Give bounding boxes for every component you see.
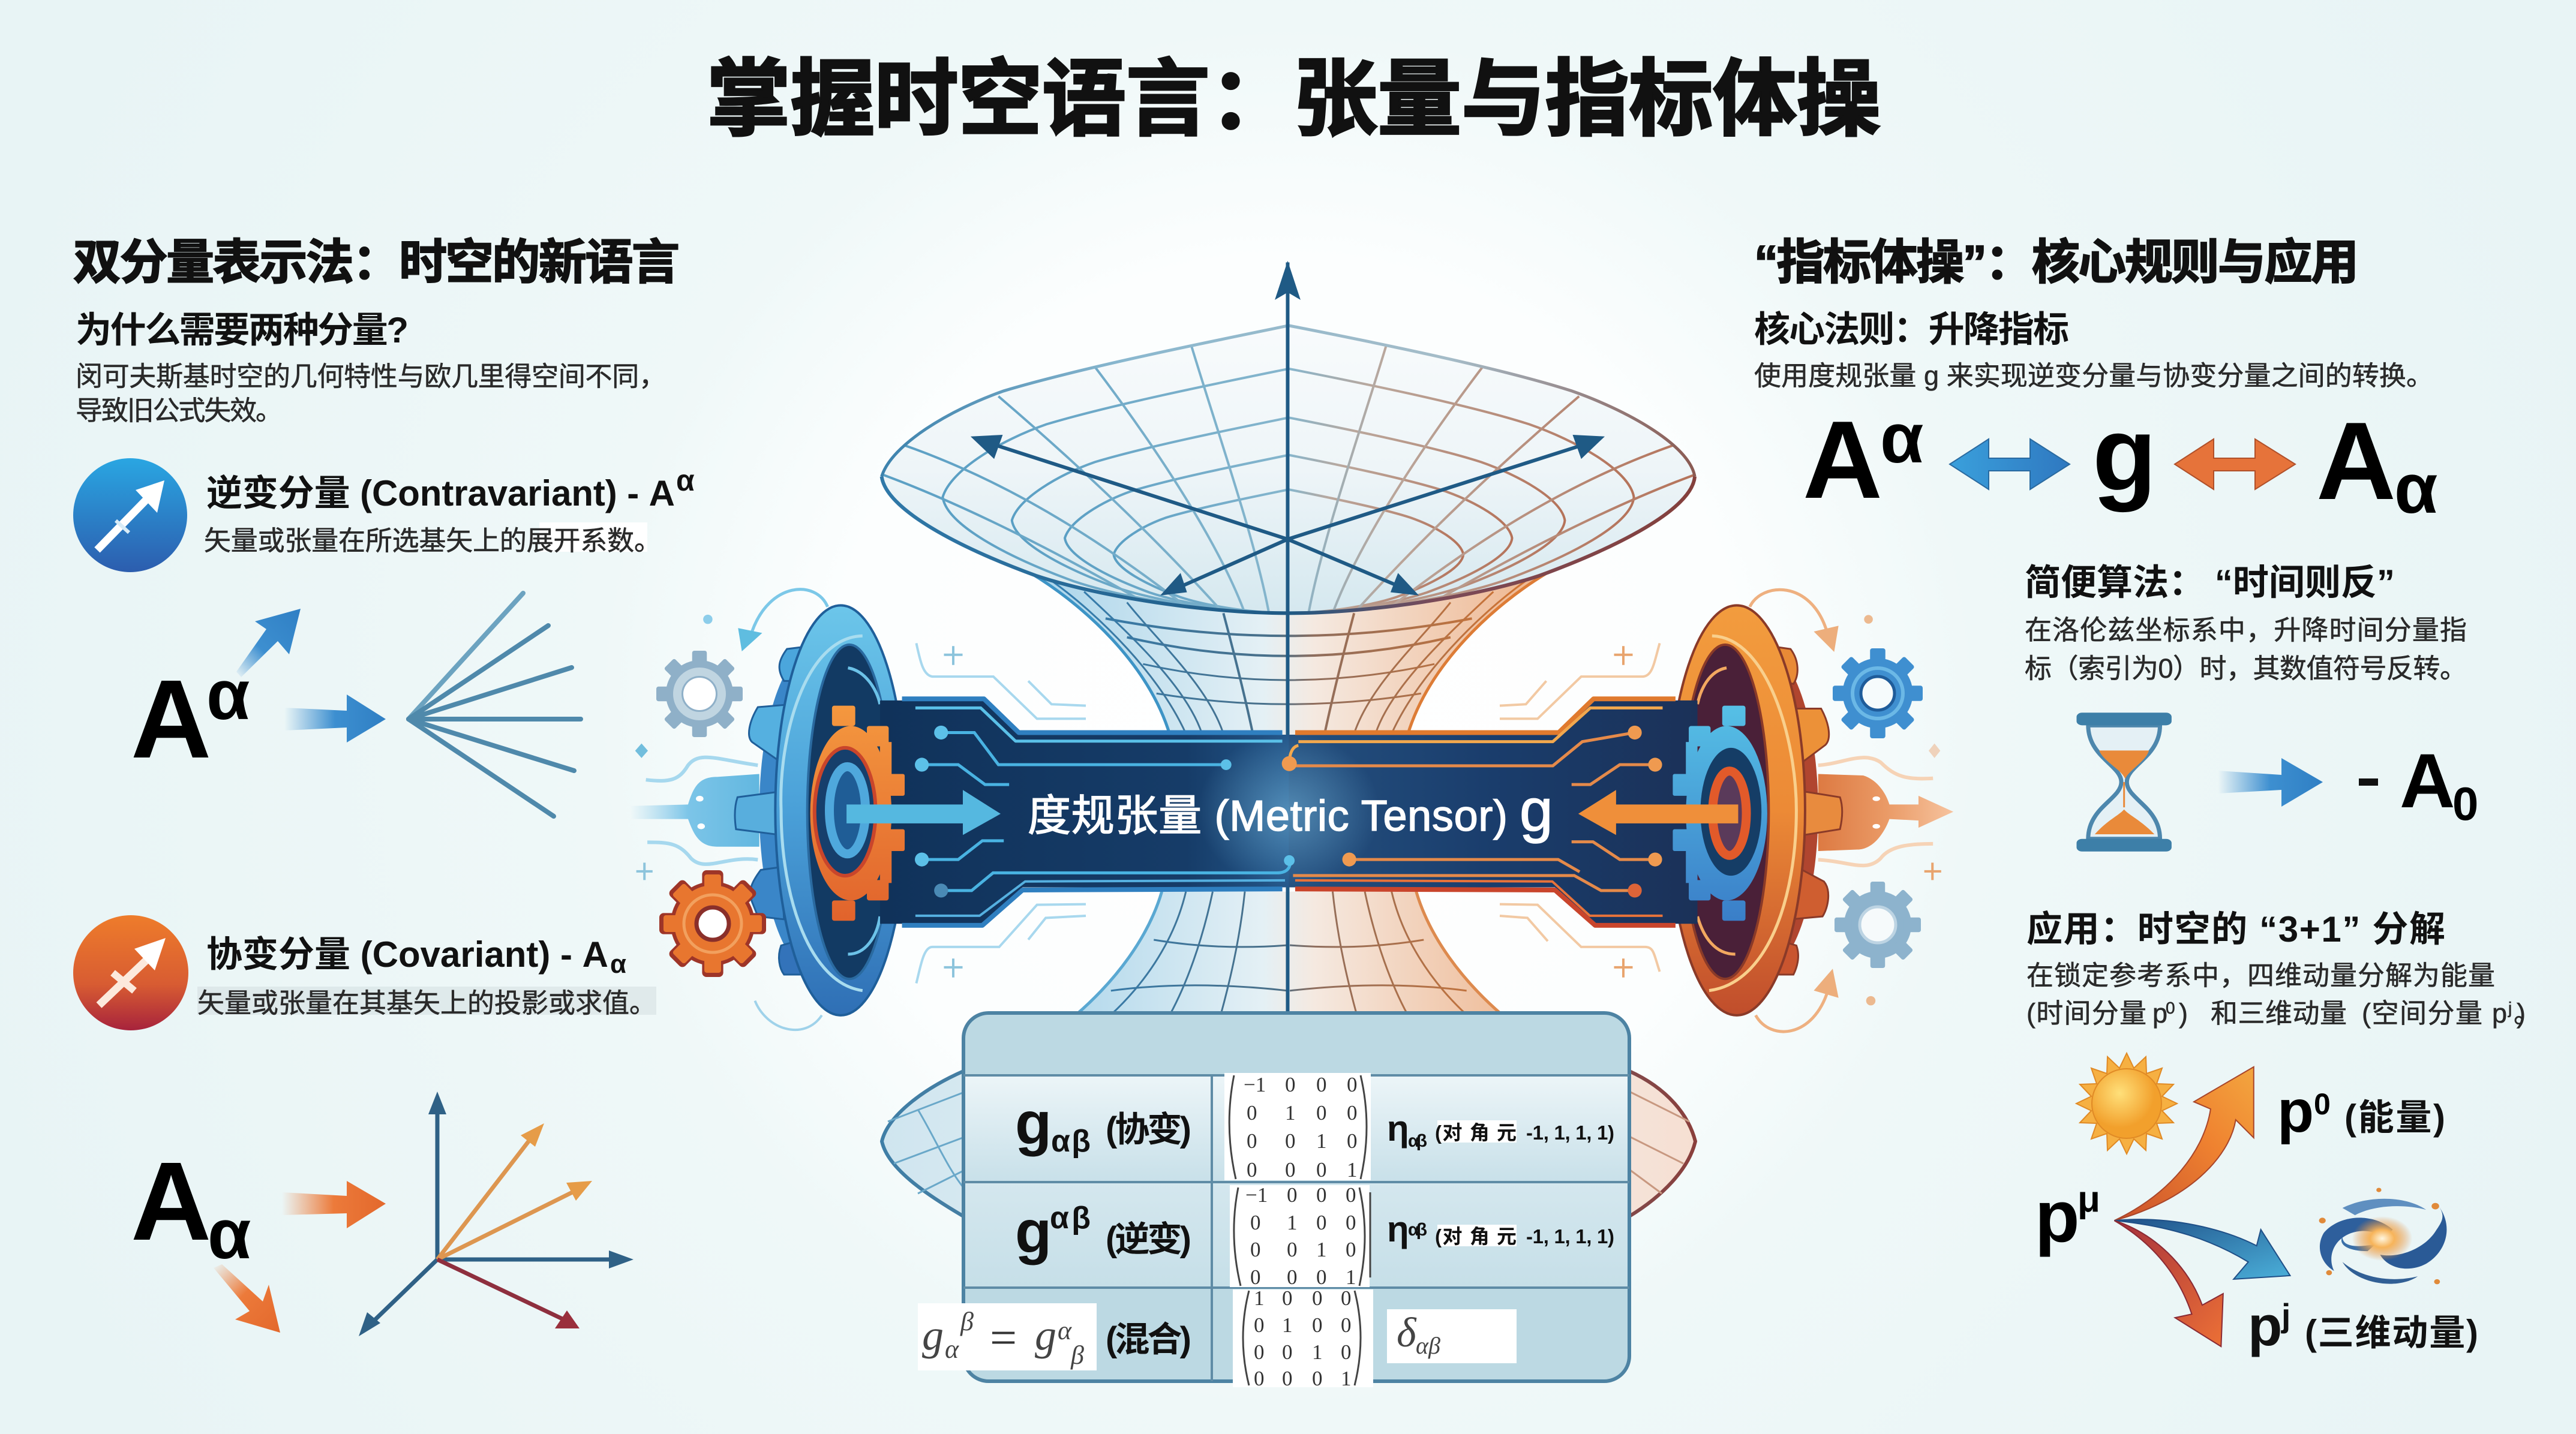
arrow: orange right <box>282 1181 386 1228</box>
row: mixed metric: δ <box>1397 1310 1417 1356</box>
label: metric tensor: g <box>1520 777 1553 844</box>
row: contravariant metric: 0 <box>1250 1211 1261 1234</box>
row: covariant metric: 0 <box>1247 1129 1257 1153</box>
row: contravariant metric: g <box>1015 1198 1052 1265</box>
icon: covariant badge <box>73 915 188 1030</box>
orange inner gear <box>810 706 905 921</box>
heading: dual-component notation: 双分量表示法：时空的新语言 <box>73 236 680 289</box>
small gear: orange lower left <box>661 872 764 975</box>
arrow: spatial blue <box>2114 1219 2290 1279</box>
row: covariant metric: 0 <box>1247 1158 1257 1182</box>
row: mixed metric: = <box>990 1312 1017 1364</box>
panel: index gymnastics <box>1754 236 2541 1357</box>
row: contravariant metric: 0 <box>1346 1183 1356 1207</box>
row: covariant metric: 0 <box>1247 1101 1257 1125</box>
text block: why two components <box>76 361 666 426</box>
row: contravariant metric: 1 <box>1346 1265 1356 1289</box>
row: contravariant metric: 0 <box>1287 1238 1297 1261</box>
panel: dual-component notation <box>73 236 695 1336</box>
icon: hourglass <box>2076 713 2172 852</box>
row: mixed metric: (混合) <box>1106 1320 1191 1359</box>
row: mixed metric: 0 <box>1282 1340 1292 1364</box>
row: mixed metric: α <box>1058 1316 1072 1345</box>
row: covariant metric: 1 <box>1347 1158 1357 1182</box>
row: contravariant metric: η <box>1387 1209 1409 1249</box>
left gear ring: back <box>735 605 906 1015</box>
row: contravariant metric: 0 <box>1316 1183 1327 1207</box>
formula: A lower alpha: α <box>208 1195 251 1274</box>
arrow: spatial red <box>2114 1220 2223 1346</box>
arrow: blue right <box>284 695 386 742</box>
text block: 3+1 decomposition <box>2026 960 2541 1029</box>
left gear ring: front <box>810 706 905 921</box>
row: mixed metric: 0 <box>1312 1313 1322 1337</box>
row: mixed metric: 0 <box>1341 1340 1351 1364</box>
row: covariant metric: −1 <box>1244 1073 1266 1096</box>
arrow: blue up right <box>236 609 301 677</box>
row: covariant metric: 1 <box>1316 1129 1327 1153</box>
text block: 3+1 decomposition: 0 <box>2166 999 2175 1017</box>
row: covariant metric: 0 <box>1316 1158 1327 1182</box>
row: mixed metric: 0 <box>1282 1286 1292 1310</box>
icon: sun <box>2076 1053 2177 1154</box>
icon: galaxy <box>2319 1188 2446 1284</box>
label: p zero energy: (能量) <box>2344 1098 2445 1138</box>
left arrow <box>846 790 1001 835</box>
row: covariant metric: η <box>1387 1108 1409 1149</box>
row: contravariant metric: (逆变) <box>1106 1220 1191 1259</box>
heading: covariant component: α <box>610 949 626 979</box>
text block: 3+1 decomposition: (空间分量 <box>2362 998 2482 1029</box>
row: mixed metric: 0 <box>1254 1367 1265 1390</box>
text block: why two components: 闵可夫斯基时空的几何特性与欧几里得空间不同， <box>76 361 666 392</box>
label: p j three-momentum <box>2248 1294 2478 1357</box>
row: contravariant metric: (对 角 元 <box>1435 1225 1517 1247</box>
formula: minus A zero: 0 <box>2452 777 2478 830</box>
text block: why two components: 导致旧公式失效。 <box>76 395 283 426</box>
row: covariant metric: 0 <box>1347 1101 1357 1125</box>
subheading: core law: 核心法则：升降指标 <box>1754 309 2069 350</box>
row: mixed metric: 0 <box>1341 1286 1351 1310</box>
row: contravariant metric: 0 <box>1346 1211 1356 1234</box>
row: contravariant metric: 0 <box>1316 1265 1327 1289</box>
right gear ring: back <box>1668 605 1842 1015</box>
row: covariant metric <box>1015 1073 1614 1182</box>
row: contravariant metric: −1 <box>1245 1183 1268 1207</box>
row: covariant metric: (对 角 元 <box>1435 1122 1517 1144</box>
formula: raising and lowering: α <box>2394 449 2438 528</box>
text block: 3+1 decomposition: 在锁定参考系中，四维动量分解为能量 <box>2026 960 2495 991</box>
row: mixed metric: β <box>960 1307 974 1336</box>
row: covariant metric: (协变) <box>1106 1110 1191 1149</box>
curved arrows and wires: right <box>1500 590 1941 1032</box>
icon: contravariant badge <box>73 458 187 572</box>
row: contravariant metric: 1 <box>1316 1238 1327 1261</box>
connector bar <box>880 699 1698 925</box>
arrow: orange double <box>2175 439 2295 489</box>
row: contravariant metric: αβ <box>1408 1220 1427 1240</box>
text block: 3+1 decomposition: p <box>2152 998 2167 1029</box>
side flow: left <box>630 757 759 864</box>
small gear: grey-blue upper left <box>656 651 743 737</box>
heading: covariant component: 协变分量 (Covariant) - A <box>206 934 608 975</box>
row: contravariant metric: 0 <box>1250 1265 1261 1289</box>
row: covariant metric: g <box>1015 1090 1052 1157</box>
lower funnel rim behind table <box>882 1071 1695 1216</box>
text block: 3+1 decomposition: p <box>2492 998 2507 1029</box>
arrow: blue double <box>1950 439 2070 489</box>
table background <box>963 1013 1629 1381</box>
text block: 3+1 decomposition: j <box>2508 999 2512 1017</box>
circuit traces <box>915 726 1662 897</box>
text block: 3+1 decomposition: (时间分量 <box>2026 998 2146 1029</box>
row: mixed metric: 0 <box>1282 1367 1292 1390</box>
arrow: time to negative <box>2218 758 2323 807</box>
row: mixed metric <box>918 1286 1517 1390</box>
right arrow <box>1578 790 1738 835</box>
row: covariant metric: -1, 1, 1, 1) <box>1526 1122 1614 1144</box>
label: p zero energy <box>2277 1078 2445 1145</box>
axis arrows in funnel <box>971 261 1605 1015</box>
row: contravariant metric: 0 <box>1287 1183 1297 1207</box>
side flow: right <box>1818 757 1953 865</box>
blue inner gear <box>1673 706 1767 921</box>
row: covariant metric: 0 <box>1316 1073 1327 1096</box>
text block: 3+1 decomposition: ) <box>2179 998 2188 1029</box>
funnel upper throat <box>1031 573 1547 735</box>
row: covariant metric: αβ <box>1408 1131 1427 1151</box>
small gear: grey-blue lower right <box>1835 882 1921 968</box>
row: mixed metric: 0 <box>1312 1286 1322 1310</box>
illustration: funnel <box>881 261 1697 1015</box>
subheading: why two components: 为什么需要两种分量? <box>76 310 409 350</box>
chart: covariant basis vectors <box>359 1092 634 1336</box>
formula: raising and lowering <box>1803 396 2438 528</box>
formula: p mu: μ <box>2077 1179 2100 1220</box>
row: mixed metric: αβ <box>1416 1332 1440 1359</box>
text block: core law: 使用度规张量 g 来实现逆变分量与协变分量之间的转换。 <box>1754 360 2433 391</box>
row: mixed metric: 1 <box>1254 1286 1265 1310</box>
row: covariant metric: 0 <box>1285 1073 1296 1096</box>
row: contravariant metric: 0 <box>1346 1238 1356 1261</box>
formula: A upper alpha: A <box>131 657 211 781</box>
text block: shortcut: 标（索引为0）时，其数值符号反转。 <box>2025 653 2467 684</box>
formula: A lower alpha: A <box>131 1140 211 1264</box>
curved arrows and wires: left <box>635 590 1086 1030</box>
row: mixed metric: 1 <box>1282 1313 1292 1337</box>
row: mixed metric: β <box>1070 1340 1084 1370</box>
row: covariant metric: 0 <box>1285 1158 1296 1182</box>
row: contravariant metric: αβ <box>1050 1201 1091 1235</box>
heading: contravariant component: α <box>676 464 695 497</box>
subheading: 3+1 decomposition: 应用：时空的 “3+1” 分解 <box>2026 909 2445 949</box>
row: mixed metric: g <box>1035 1311 1056 1359</box>
formula: raising and lowering: α <box>1880 399 1924 478</box>
chart: basis vector fan <box>409 593 581 816</box>
text block: contravariant description: 矢量或张量在所选基矢上的展开系数。 <box>204 525 661 556</box>
text block: 3+1 decomposition: )。 <box>2514 998 2541 1029</box>
arrow: orange down right <box>214 1264 280 1333</box>
label: p zero energy: 0 <box>2314 1087 2331 1121</box>
label: p j three-momentum: (三维动量) <box>2305 1313 2478 1353</box>
row: covariant metric: 0 <box>1285 1129 1296 1153</box>
row: mixed metric: 0 <box>1254 1313 1265 1337</box>
row: covariant metric: 0 <box>1316 1101 1327 1125</box>
formula: raising and lowering: A <box>1803 398 1883 521</box>
row: mixed metric: 0 <box>1254 1340 1265 1364</box>
label: p j three-momentum: p <box>2248 1294 2282 1357</box>
label: metric tensor: 度规张量 (Metric Tensor) <box>1028 792 1508 840</box>
row: contravariant metric: 0 <box>1287 1265 1297 1289</box>
funnel top rim grid <box>881 326 1697 613</box>
row: covariant metric: 0 <box>1347 1129 1357 1153</box>
row: mixed metric: 0 <box>1312 1367 1322 1390</box>
title: 掌握时空语言：张量与指标体操 <box>707 52 1881 146</box>
right gear ring: front <box>1673 706 1767 921</box>
row: covariant metric: αβ <box>1051 1124 1091 1159</box>
row: mixed metric: g <box>922 1311 944 1359</box>
arrow: energy component <box>2114 1067 2254 1220</box>
formula: raising and lowering: g <box>2092 396 2157 513</box>
formula: A upper alpha <box>131 656 250 781</box>
row: covariant metric: 0 <box>1347 1073 1357 1096</box>
panel: metric table <box>918 1013 1629 1390</box>
text block: shortcut <box>2025 615 2467 684</box>
formula: minus A zero: A <box>2400 738 2455 824</box>
small gear: blue upper right <box>1833 648 1923 738</box>
heading: index gymnastics rules: “指标体操”：核心规则与应用 <box>1754 236 2359 289</box>
label: p zero energy: p <box>2277 1078 2314 1145</box>
formula: A upper alpha: α <box>206 656 250 735</box>
formula: raising and lowering: A <box>2316 399 2396 522</box>
subheading: shortcut: 简便算法： “时间则反” <box>2025 563 2395 603</box>
arrows: momentum decomposition <box>2114 1067 2290 1346</box>
row: mixed metric: 1 <box>1341 1367 1351 1390</box>
row: covariant metric: 1 <box>1285 1101 1296 1125</box>
row: mixed metric: 0 <box>1341 1313 1351 1337</box>
formula: p mu <box>2035 1176 2100 1257</box>
formula: minus A zero <box>2359 738 2478 830</box>
text block: covariant description: 矢量或张量在其基矢上的投影或求值。 <box>197 988 656 1018</box>
row: contravariant metric: -1, 1, 1, 1) <box>1526 1225 1614 1247</box>
row: mixed metric: α <box>945 1334 959 1364</box>
row: contravariant metric: 0 <box>1250 1238 1261 1261</box>
label: p j three-momentum: j <box>2281 1297 2290 1334</box>
formula: p mu: p <box>2035 1176 2080 1257</box>
row: contravariant metric: 0 <box>1316 1211 1327 1234</box>
row: contravariant metric: 1 <box>1287 1211 1297 1234</box>
row: mixed metric: 1 <box>1312 1340 1322 1364</box>
text block: shortcut: 在洛伦兹坐标系中，升降时间分量指 <box>2025 615 2467 645</box>
heading: contravariant component: 逆变分量 (Contravariant) - A <box>206 473 675 513</box>
funnel lower throat <box>1076 892 1502 1015</box>
formula: A lower alpha <box>131 1140 251 1274</box>
row: contravariant metric <box>1015 1183 1614 1289</box>
text block: 3+1 decomposition: 和三维动量 <box>2211 998 2347 1029</box>
label: metric tensor <box>1028 777 1553 844</box>
